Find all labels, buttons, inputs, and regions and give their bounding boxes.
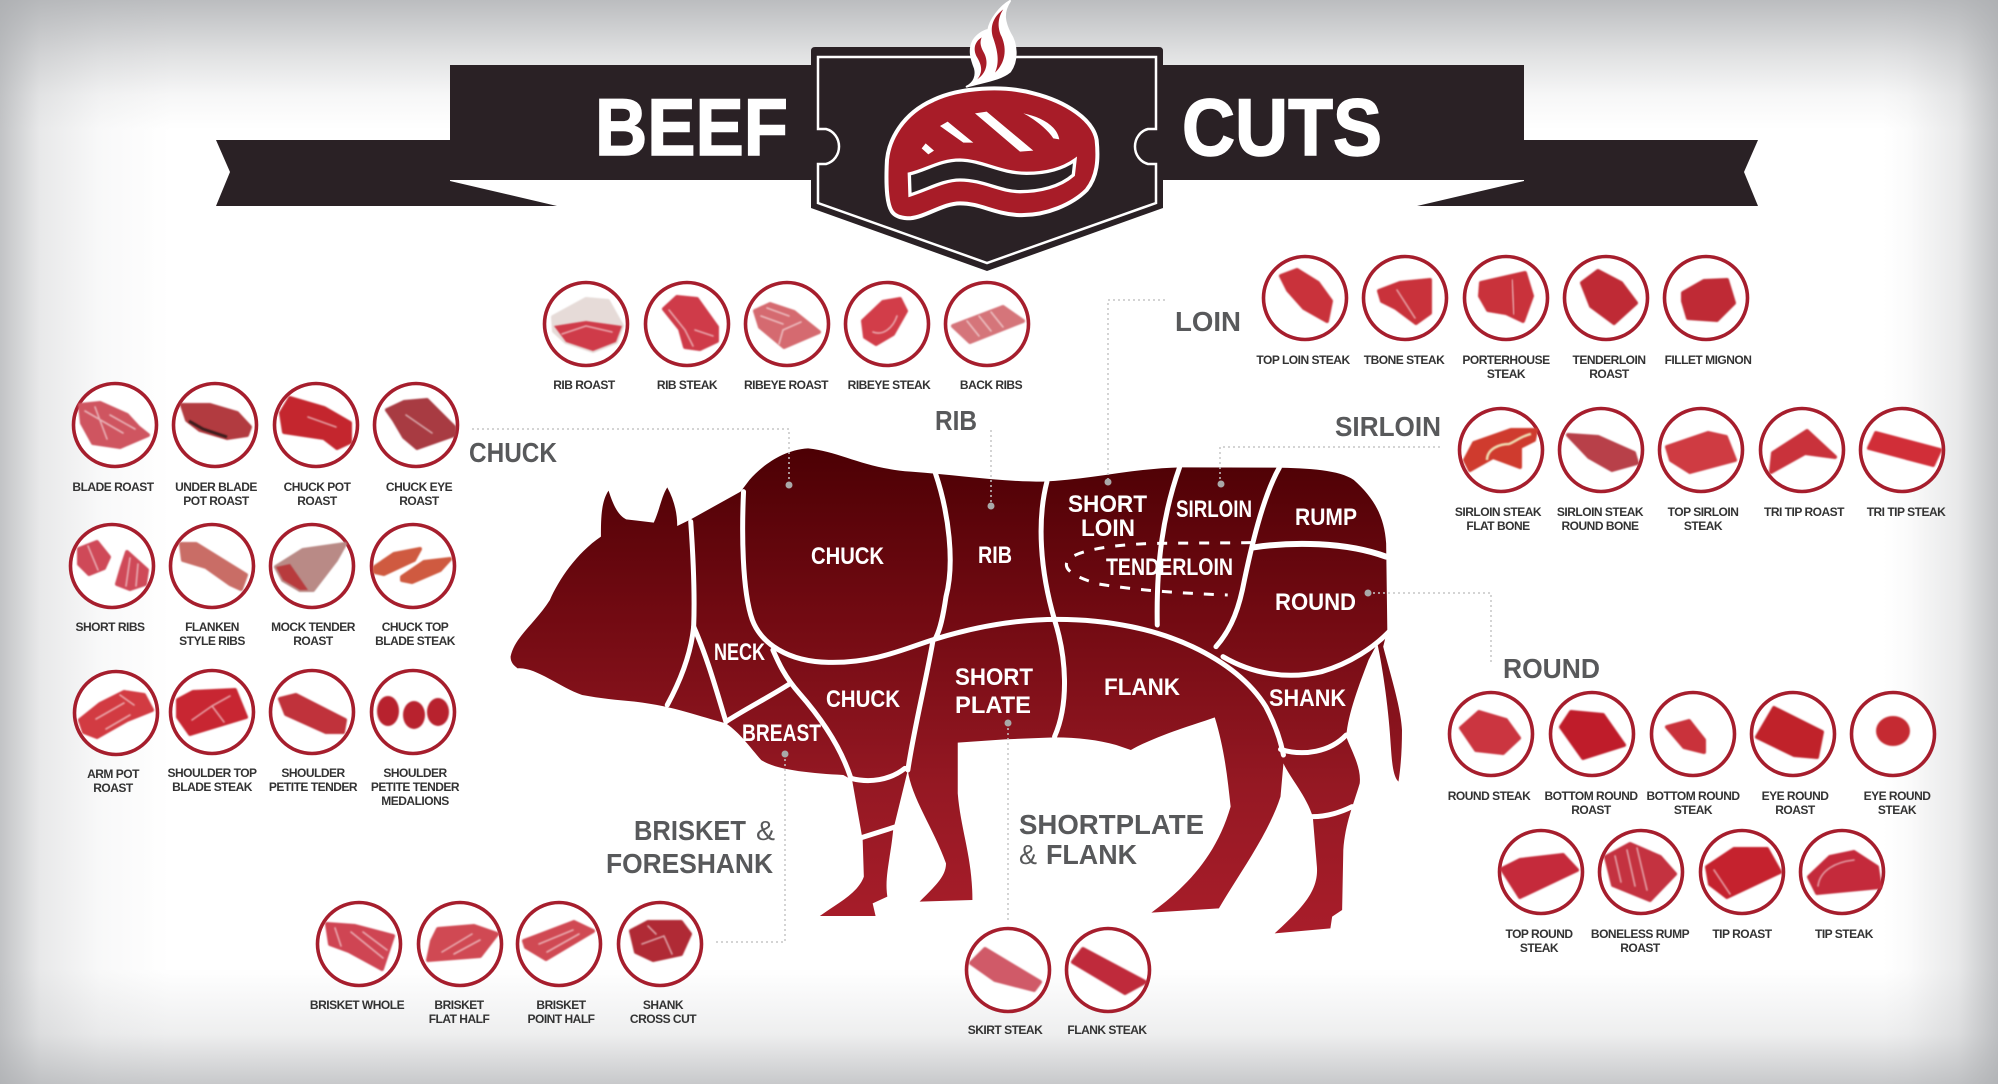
cut: brisket point half: POINT HALF bbox=[528, 1012, 595, 1026]
cut: chuck pot roast: CHUCK POT bbox=[284, 480, 352, 494]
panel: rib cuts bbox=[544, 282, 1028, 392]
cut: tenderloin roast: ROAST bbox=[1589, 367, 1630, 381]
cut: porterhouse steak: STEAK bbox=[1487, 367, 1526, 381]
cut: sirloin steak flat bone: SIRLOIN STEAK bbox=[1455, 505, 1542, 519]
cut: tip roast bbox=[1700, 830, 1784, 941]
icon: steak logo with flame bbox=[886, 1, 1097, 218]
steak band bbox=[909, 160, 1075, 195]
ribbon right tail bbox=[1417, 140, 1758, 206]
cut: brisket point half bbox=[518, 902, 600, 1026]
cut: top sirloin steak bbox=[1660, 408, 1742, 533]
cut: shank cross cut: SHANK bbox=[643, 998, 684, 1012]
cut: blade roast bbox=[72, 384, 156, 494]
cut: brisket whole bbox=[310, 902, 405, 1012]
cut: shoulder top blade steak: SHOULDER TOP bbox=[167, 766, 257, 780]
cut: shoulder petite tender bbox=[269, 670, 358, 794]
cut: chuck eye roast bbox=[374, 384, 458, 508]
panel: shortplate and flank cuts bbox=[966, 928, 1150, 1037]
section heading: CHUCK: CHUCK bbox=[469, 437, 557, 468]
section heading: LOIN: LOIN bbox=[1175, 306, 1241, 337]
section heading: RIB: RIB bbox=[935, 405, 977, 436]
cow cut labels: CHUCK bbox=[811, 543, 885, 570]
cut: flank steak: FLANK STEAK bbox=[1067, 1023, 1147, 1037]
cut: tenderloin roast bbox=[1564, 256, 1648, 381]
cut: top round steak: TOP ROUND bbox=[1505, 927, 1573, 941]
panel: chuck cuts bbox=[70, 384, 460, 808]
grill marks bbox=[922, 112, 1059, 154]
cut: bottom round roast bbox=[1544, 692, 1638, 817]
cut: porterhouse steak bbox=[1462, 256, 1550, 381]
cut: shank cross cut bbox=[618, 902, 702, 1026]
cut: chuck top blade steak: CHUCK TOP bbox=[382, 620, 449, 634]
cut: top sirloin steak: STEAK bbox=[1684, 519, 1723, 533]
cut: shoulder petite tender medalions: MEDALIONS bbox=[381, 794, 449, 808]
cut: short ribs: SHORT RIBS bbox=[75, 620, 145, 634]
cut: shoulder petite tender: SHOULDER bbox=[281, 766, 345, 780]
cut: tbone steak bbox=[1364, 256, 1446, 367]
cut: tri tip roast bbox=[1760, 408, 1845, 519]
cut: shoulder top blade steak: BLADE STEAK bbox=[172, 780, 253, 794]
cow cut labels: ROUND bbox=[1275, 589, 1356, 616]
cut: ribeye roast: RIBEYE ROAST bbox=[744, 378, 829, 392]
cut: round steak: ROUND STEAK bbox=[1448, 789, 1531, 803]
cut: blade roast: BLADE ROAST bbox=[72, 480, 155, 494]
cut: chuck top blade steak bbox=[372, 524, 456, 648]
badge inner outline bbox=[818, 57, 1156, 263]
ribbon band bbox=[450, 65, 1524, 180]
cut: top loin steak: TOP LOIN STEAK bbox=[1256, 353, 1350, 367]
panel: sirloin cuts bbox=[1455, 408, 1946, 533]
cut: top round steak bbox=[1500, 830, 1582, 955]
cut: ribeye steak: RIBEYE STEAK bbox=[848, 378, 931, 392]
cut: brisket flat half bbox=[418, 902, 502, 1026]
cut: brisket whole: BRISKET WHOLE bbox=[310, 998, 405, 1012]
cow cut labels: FLANK bbox=[1104, 674, 1181, 701]
cut: eye round steak: EYE ROUND bbox=[1864, 789, 1931, 803]
cut: shoulder petite tender medalions: PETITE TENDER bbox=[371, 780, 460, 794]
badge bbox=[811, 47, 1163, 271]
section heading: BRISKET & FORESHANK: BRISKET bbox=[634, 815, 746, 846]
cut: arm pot roast bbox=[74, 672, 158, 795]
cow cut labels bbox=[714, 491, 1357, 747]
section heading: SIRLOIN: SIRLOIN bbox=[1335, 411, 1441, 442]
cut: sirloin steak flat bone bbox=[1455, 408, 1542, 533]
cow silhouette bbox=[511, 448, 1402, 933]
cow cut labels: BREAST bbox=[742, 720, 821, 747]
cow cut labels: SHORT bbox=[955, 664, 1033, 691]
cut: skirt steak bbox=[966, 928, 1050, 1037]
cut: eye round roast bbox=[1752, 692, 1834, 817]
cut: fillet mignon: FILLET MIGNON bbox=[1665, 353, 1751, 367]
cut: flanken style ribs: STYLE RIBS bbox=[179, 634, 245, 648]
cut: bottom round steak bbox=[1646, 692, 1740, 817]
cut: ribeye steak bbox=[846, 282, 931, 392]
cut: sirloin steak round bone: ROUND BONE bbox=[1561, 519, 1639, 533]
cut: bottom round steak: STEAK bbox=[1674, 803, 1713, 817]
section heading: SHORTPLATE & FLANK: FLANK bbox=[1046, 839, 1137, 870]
cow diagram bbox=[511, 448, 1402, 933]
cut: brisket flat half: FLAT HALF bbox=[429, 1012, 489, 1026]
cut: tri tip steak: TRI TIP STEAK bbox=[1867, 505, 1946, 519]
cut: rib roast: RIB ROAST bbox=[553, 378, 616, 392]
cow cut labels: RUMP bbox=[1295, 504, 1357, 531]
cut: ribeye roast bbox=[744, 282, 829, 392]
cow cut labels: RIB bbox=[978, 542, 1012, 569]
cut divider lines bbox=[667, 467, 1389, 838]
steak body bbox=[886, 88, 1097, 218]
cow cut labels: LOIN bbox=[1081, 515, 1135, 542]
cut: eye round steak bbox=[1852, 692, 1934, 817]
cut: back ribs bbox=[946, 282, 1028, 392]
cut: fillet mignon bbox=[1664, 256, 1751, 367]
cut: sirloin steak flat bone: FLAT BONE bbox=[1466, 519, 1530, 533]
cut: top sirloin steak: TOP SIRLOIN bbox=[1668, 505, 1738, 519]
cut: rib steak: RIB STEAK bbox=[657, 378, 718, 392]
cow cut labels: CHUCK bbox=[826, 686, 901, 713]
cut: sirloin steak round bone: SIRLOIN STEAK bbox=[1557, 505, 1644, 519]
section heading: SHORTPLATE & FLANK bbox=[1019, 809, 1204, 870]
cut: rib steak bbox=[646, 282, 728, 392]
cut: tri tip steak bbox=[1860, 408, 1946, 519]
section heading: BRISKET & FORESHANK bbox=[606, 815, 775, 879]
cut: arm pot roast: ARM POT bbox=[87, 767, 140, 781]
cut: bottom round steak: BOTTOM ROUND bbox=[1646, 789, 1740, 803]
cut: tri tip roast: TRI TIP ROAST bbox=[1764, 505, 1845, 519]
cow cut labels: TENDERLOIN bbox=[1106, 554, 1233, 581]
cut: mock tender roast: MOCK TENDER bbox=[271, 620, 356, 634]
cut: skirt steak: SKIRT STEAK bbox=[968, 1023, 1043, 1037]
cut: mock tender roast bbox=[270, 524, 356, 648]
cut: arm pot roast: ROAST bbox=[93, 781, 134, 795]
panel: brisket and foreshank cuts bbox=[310, 902, 702, 1026]
panel: loin cuts bbox=[1256, 256, 1751, 381]
cut: chuck eye roast: ROAST bbox=[399, 494, 440, 508]
cut: brisket flat half: BRISKET bbox=[434, 998, 485, 1012]
cut: under blade pot roast: UNDER BLADE bbox=[175, 480, 257, 494]
cut: round steak bbox=[1448, 692, 1532, 803]
cut: mock tender roast: ROAST bbox=[293, 634, 334, 648]
cut: sirloin steak round bone bbox=[1557, 408, 1644, 533]
cut: shoulder top blade steak bbox=[167, 670, 257, 794]
cut: under blade pot roast bbox=[174, 384, 257, 508]
cut: boneless rump roast: BONELESS RUMP bbox=[1591, 927, 1690, 941]
cut: boneless rump roast: ROAST bbox=[1620, 941, 1661, 955]
cut: shoulder petite tender: PETITE TENDER bbox=[269, 780, 358, 794]
title word CUTS: CUTS bbox=[1182, 83, 1382, 173]
cut: top round steak: STEAK bbox=[1520, 941, 1559, 955]
cut: rib roast bbox=[544, 282, 628, 392]
cut: bottom round roast: BOTTOM ROUND bbox=[1544, 789, 1638, 803]
cut: shank cross cut: CROSS CUT bbox=[630, 1012, 697, 1026]
cut: flanken style ribs: FLANKEN bbox=[185, 620, 239, 634]
cut: tip roast: TIP ROAST bbox=[1712, 927, 1773, 941]
cut: tip steak: TIP STEAK bbox=[1815, 927, 1874, 941]
flame bbox=[967, 1, 1016, 87]
cut: tenderloin roast: TENDERLOIN bbox=[1572, 353, 1646, 367]
cut: brisket point half: BRISKET bbox=[536, 998, 587, 1012]
cut: shoulder petite tender medalions bbox=[371, 670, 460, 808]
cut: tip steak bbox=[1800, 830, 1884, 941]
cow cut labels: SHANK bbox=[1269, 685, 1347, 712]
cut: eye round steak: STEAK bbox=[1878, 803, 1917, 817]
cut: bottom round roast: ROAST bbox=[1571, 803, 1612, 817]
cut: chuck eye roast: CHUCK EYE bbox=[386, 480, 453, 494]
cow cut labels: SHORT bbox=[1068, 491, 1147, 518]
title word BEEF: BEEF bbox=[595, 83, 788, 173]
section heading: BRISKET & FORESHANK: FORESHANK bbox=[606, 848, 773, 879]
cow cut labels: NECK bbox=[714, 639, 765, 666]
cut: chuck top blade steak: BLADE STEAK bbox=[375, 634, 456, 648]
section heading: BRISKET & FORESHANK: & bbox=[756, 815, 775, 846]
cut: porterhouse steak: PORTERHOUSE bbox=[1462, 353, 1550, 367]
cut: back ribs: BACK RIBS bbox=[960, 378, 1023, 392]
cut: chuck pot roast: ROAST bbox=[297, 494, 338, 508]
cut: flanken style ribs bbox=[170, 524, 254, 648]
cut: boneless rump roast bbox=[1591, 830, 1690, 955]
dotted leader lines bbox=[472, 300, 1491, 942]
header banner bbox=[216, 47, 1758, 271]
section heading: ROUND: ROUND bbox=[1503, 653, 1600, 684]
cut: tbone steak: TBONE STEAK bbox=[1364, 353, 1445, 367]
cow cut labels: PLATE bbox=[955, 692, 1031, 719]
cut: eye round roast: ROAST bbox=[1775, 803, 1816, 817]
cut: chuck pot roast bbox=[274, 384, 358, 508]
cow cut labels: SIRLOIN bbox=[1176, 496, 1252, 523]
section heading: SHORTPLATE & FLANK: SHORTPLATE bbox=[1019, 809, 1204, 840]
cut: top loin steak bbox=[1256, 256, 1350, 367]
ribbon left tail bbox=[216, 140, 557, 206]
cut: flank steak bbox=[1066, 928, 1150, 1037]
panel: round cuts bbox=[1448, 692, 1934, 955]
cut: shoulder petite tender medalions: SHOULDER bbox=[383, 766, 447, 780]
cut: short ribs bbox=[70, 524, 154, 634]
cut: eye round roast: EYE ROUND bbox=[1762, 789, 1829, 803]
cut: under blade pot roast: POT ROAST bbox=[183, 494, 250, 508]
section heading: SHORTPLATE & FLANK: & bbox=[1019, 839, 1037, 870]
